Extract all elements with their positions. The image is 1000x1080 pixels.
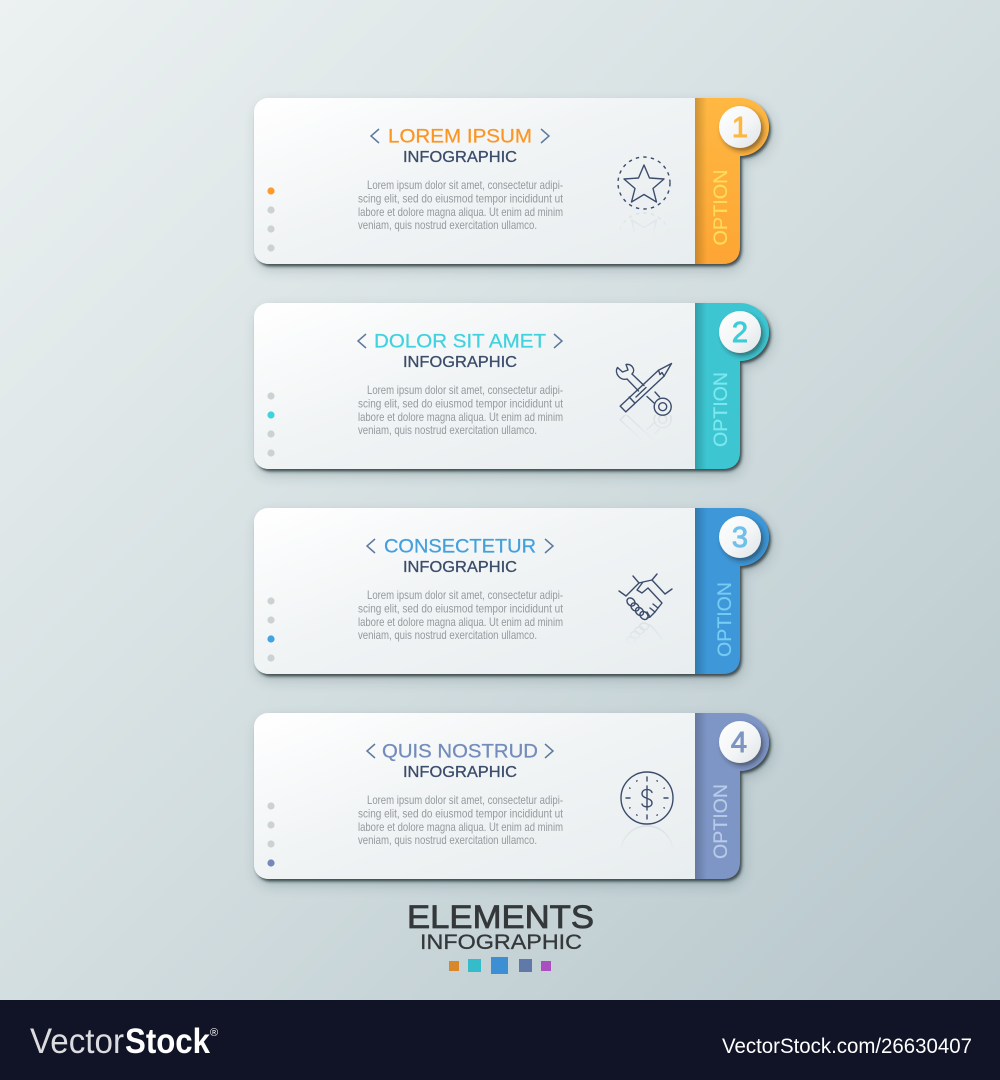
footer title: elements infographic (407, 899, 594, 974)
tab inner shadow 1 (695, 98, 707, 264)
progress dots 3 (267, 597, 275, 662)
option label 2: OPTION (711, 372, 732, 447)
logo: vectorstock (30, 1022, 218, 1061)
card and tab body 3 (254, 508, 769, 674)
heading 2: DOLOR SIT AMET (374, 332, 546, 352)
logo: vectorstock: Vector (30, 1022, 124, 1061)
heading 3: CONSECTETUR (384, 536, 536, 558)
number badge 2: 2 (732, 317, 748, 349)
progress dots 2 (267, 392, 275, 457)
number badge 3 (719, 516, 761, 558)
number badge 1 (719, 106, 761, 148)
subheading 1: INFOGRAPHIC (403, 149, 517, 166)
panel: option 3 (254, 508, 769, 674)
body text 4 (358, 793, 564, 847)
body text 3 (358, 588, 564, 642)
body text 1 (358, 178, 564, 232)
body text 3: Lorem ipsum dolor sit amet, consectetur adipi- (367, 588, 563, 602)
subheading 2: INFOGRAPHIC (403, 354, 517, 371)
icon: dollar coin (621, 772, 673, 824)
option label 4: OPTION (711, 784, 732, 859)
panel: option 4 (254, 713, 769, 879)
subtitle: infographic: INFOGRAPHIC (420, 931, 582, 954)
logo: vectorstock: Stock (125, 1022, 210, 1061)
tab inner shadow 2 (695, 303, 707, 469)
body text 2: Lorem ipsum dolor sit amet, consectetur adipi- (367, 383, 563, 397)
image url: VectorStock.com/26630407 (722, 1035, 972, 1058)
icon reflection: dollar coin (624, 825, 671, 840)
icon: handshake (619, 574, 672, 621)
logo: vectorstock: ® (210, 1027, 218, 1039)
number badge 1: 1 (732, 112, 748, 144)
progress dots 1 (267, 187, 275, 252)
icon reflection: handshake (630, 622, 659, 636)
panel: option 2 (254, 303, 769, 469)
heading 1: LOREM IPSUM (388, 126, 532, 148)
body text 4: scing elit, sed do eiusmod tempor incididunt ut (358, 806, 564, 820)
tab inner shadow 4 (695, 713, 707, 879)
colour squares (449, 957, 551, 974)
body text 3: veniam, quis nostrud exercitation ullamco. (358, 628, 537, 642)
tab inner shadow 3 (695, 508, 707, 674)
panel: option 1 (254, 98, 769, 265)
icon: wrench and pencil (616, 364, 672, 415)
body text 1: veniam, quis nostrud exercitation ullamco. (358, 218, 537, 232)
body text 2: scing elit, sed do eiusmod tempor incididunt ut (358, 396, 564, 410)
number badge 2 (719, 311, 761, 353)
subheading 4: INFOGRAPHIC (403, 764, 517, 781)
subheading 3: INFOGRAPHIC (403, 559, 517, 576)
body text 4: Lorem ipsum dolor sit amet, consectetur adipi- (367, 793, 563, 807)
title: elements: ELEMENTS (407, 899, 594, 935)
card and tab body 4 (254, 713, 769, 879)
footer watermark bar (0, 1000, 1000, 1080)
body text 3: labore et dolore magna aliqua. Ut enim ad minim (358, 615, 563, 629)
progress dots 4 (267, 802, 275, 867)
number badge 4 (719, 721, 761, 763)
body text 3: scing elit, sed do eiusmod tempor incididunt ut (358, 602, 564, 616)
body text 1: labore et dolore magna aliqua. Ut enim ad minim (358, 205, 563, 219)
body text 2: veniam, quis nostrud exercitation ullamco. (358, 423, 537, 437)
card and tab body 1 (254, 98, 769, 264)
icon: star (618, 157, 670, 209)
option label 3: OPTION (715, 582, 736, 657)
icon reflection: wrench and pencil (620, 415, 672, 430)
body text 4: veniam, quis nostrud exercitation ullamco. (358, 833, 537, 847)
option label 1: OPTION (711, 170, 732, 246)
heading 4: QUIS NOSTRUD (382, 742, 538, 762)
number badge 3: 3 (732, 522, 748, 554)
body text 2 (358, 383, 564, 437)
number badge 4: 4 (731, 727, 747, 759)
body text 1: scing elit, sed do eiusmod tempor incididunt ut (358, 192, 564, 206)
card and tab body 2 (254, 303, 769, 469)
icon reflection: star (624, 212, 666, 226)
body text 4: labore et dolore magna aliqua. Ut enim ad minim (358, 820, 563, 834)
body text 2: labore et dolore magna aliqua. Ut enim ad minim (358, 410, 563, 424)
body text 1: Lorem ipsum dolor sit amet, consectetur adipi- (367, 178, 563, 192)
